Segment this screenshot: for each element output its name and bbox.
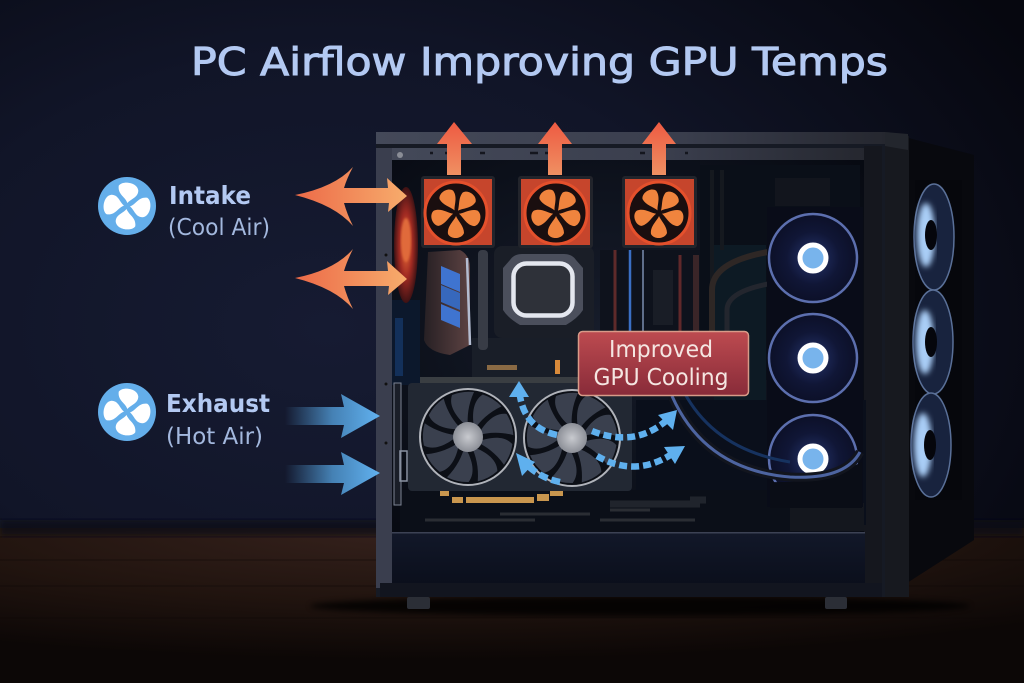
up arrow 2 (538, 122, 572, 175)
interior cabling and components (392, 165, 866, 533)
top exhaust fan 2 (518, 176, 593, 248)
top arrows (437, 122, 676, 175)
side fan 1 (914, 184, 954, 290)
legend: exhaust (98, 383, 270, 450)
side panel (885, 132, 974, 597)
feet (407, 597, 847, 609)
airflow arrow: right upper (592, 410, 677, 437)
airflow arrow: right lower (597, 446, 685, 467)
exhaust arrows (285, 394, 380, 495)
icon: intake fan (98, 177, 156, 235)
legend: intake (98, 177, 270, 241)
graphics card (394, 377, 632, 505)
liquid cooling tube (672, 392, 860, 477)
side fan 3 (911, 393, 951, 497)
PSU shroud (380, 532, 882, 597)
title: PC Airflow Improving GPU Temps (191, 40, 888, 84)
gold connectors (440, 491, 563, 503)
radiator fan top (769, 214, 857, 302)
intake arrow 2 (295, 249, 407, 309)
wooden floor (0, 520, 1024, 683)
top exhaust fan 3 (622, 176, 697, 248)
airflow arrow: up-left (509, 381, 557, 435)
radiator fans (767, 207, 863, 508)
callout: improved GPU cooling (578, 332, 748, 396)
GPU airflow arrows (509, 381, 685, 482)
intake arrow 1 (295, 167, 407, 226)
label: intake: Intake (169, 181, 251, 210)
up arrow 1 (437, 122, 472, 175)
GPU fan 1 (420, 389, 516, 485)
PC case (376, 132, 974, 609)
label: exhaust: Exhaust (166, 389, 270, 418)
radiator fan bottom (769, 415, 857, 503)
CPU pump block (494, 246, 594, 338)
top exhaust fan 1 (421, 176, 495, 248)
GPU fan 2 (524, 390, 620, 486)
up arrow 3 (642, 122, 676, 175)
exhaust arrow 2 (285, 452, 380, 495)
RAM modules (424, 250, 488, 355)
side fan 2 (913, 290, 953, 394)
intake arrows (295, 167, 407, 309)
label: hot air: (Hot Air) (166, 424, 263, 450)
callout: improved GPU cooling: Improved (609, 337, 713, 363)
label: cool air: (Cool Air) (168, 215, 270, 241)
radiator fan middle (769, 314, 857, 402)
left intake fan glow (394, 187, 418, 303)
case frame (376, 132, 885, 597)
airflow arrow: lower-left (516, 453, 560, 482)
callout: improved GPU cooling: GPU Cooling (594, 365, 728, 391)
exhaust arrow 1 (285, 394, 380, 438)
icon: exhaust fan (98, 383, 156, 441)
